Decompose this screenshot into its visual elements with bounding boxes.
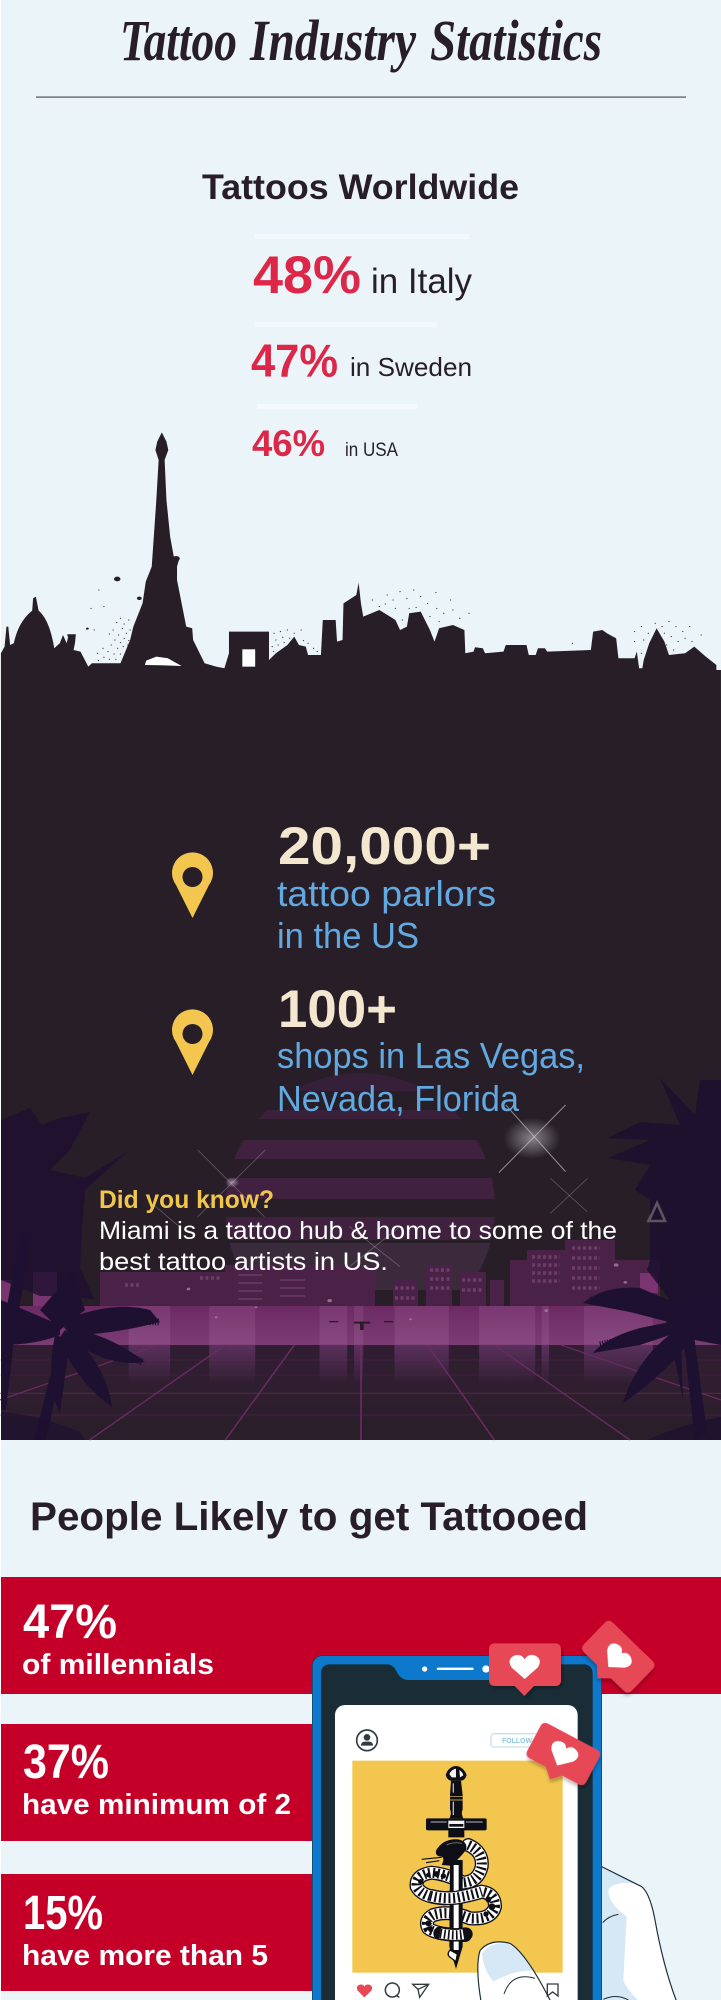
bar: 37% have minimum of 2: have minimum of 2: [22, 1789, 291, 1821]
icon: map pin 1: [172, 852, 213, 918]
Miami retro scene: [0, 1073, 721, 1440]
icon: hand palm: [602, 1867, 677, 2000]
sparkles: [152, 1105, 666, 1320]
follow button: FOLLOW: [502, 1738, 532, 1745]
stat: 100+ shops in Las Vegas, Nevada, Florida: [277, 980, 585, 1119]
title: [120, 8, 602, 73]
title: Industry: [249, 8, 416, 73]
like badge 1: [489, 1643, 561, 1696]
post card: [335, 1705, 578, 2000]
title: Statistics: [430, 8, 602, 73]
sun stripes: [220, 1073, 500, 1290]
dagger: [426, 1766, 487, 1969]
snake body behind blade: [417, 1845, 495, 1935]
callout: did you know: best tattoo artists in US.: [99, 1248, 388, 1276]
horizon band and floor: [1, 1306, 721, 1345]
stat: 47% in Sweden: [251, 322, 472, 386]
heading: Tattoos Worldwide: Tattoos Worldwide: [202, 168, 519, 207]
bar: 47% of millennials: 47%: [23, 1596, 117, 1649]
bar: 47% of millennials: of millennials: [22, 1649, 214, 1681]
callout: did you know: Did you know?: [99, 1186, 274, 1214]
icon: map pin 2: [172, 1009, 213, 1075]
grid lines: [0, 1345, 721, 1440]
like badge 2: [574, 1619, 657, 1701]
icon: send: [413, 1984, 429, 1997]
follow button: [491, 1734, 538, 1747]
stat: 47% in Sweden: in Sweden: [350, 352, 472, 382]
stat: 46% in USA: 46%: [252, 423, 325, 464]
phone body: [312, 1656, 602, 2000]
stat: 100+ shops in Las Vegas, Nevada, Florida: shops in Las Vegas,: [277, 1035, 585, 1076]
like badge 3: [520, 1721, 602, 1795]
icon: red heart: [357, 1985, 372, 1997]
stat: 20,000+ tattoo parlors in the US: tattoo parlors: [277, 873, 496, 914]
icon: finger: [478, 1942, 552, 2000]
callout: did you know: Miami is a tattoo hub & home to some of the: [99, 1217, 617, 1245]
snake head: [422, 1839, 466, 1866]
dark city panel background: [1, 700, 721, 1440]
stat: 48% in Italy: 48%: [253, 246, 361, 305]
title: Tattoo: [120, 8, 237, 73]
icon: bookmark: [547, 1984, 558, 1996]
bar: 37% have minimum of 2: [1, 1724, 313, 1841]
bar: 15% have more than 5: [1, 1874, 313, 1991]
stat: 48% in Italy: [253, 234, 472, 305]
road marker: [329, 1321, 393, 1330]
phone camera and speaker: [422, 1665, 490, 1673]
city buildings: [1, 1240, 660, 1317]
reflections: [129, 1306, 653, 1384]
bar: 47% of millennials: [1, 1577, 721, 1694]
stat: 100+ shops in Las Vegas, Nevada, Florida: 100+: [278, 980, 397, 1039]
phone with tattoo post: [312, 1619, 677, 2000]
dagger tip ornament: [448, 1950, 457, 1962]
stat: 46% in USA: in USA: [345, 440, 398, 461]
stat: 20,000+ tattoo parlors in the US: 20,000+: [278, 817, 491, 876]
snake skin spots: [418, 1871, 495, 1932]
tattoo image panel: [352, 1761, 563, 1973]
bar: 37% have minimum of 2: 37%: [23, 1736, 109, 1789]
stat: 47% in Sweden: 47%: [251, 334, 338, 386]
stat: 20,000+ tattoo parlors in the US: [277, 817, 496, 956]
stat: 46% in USA: [252, 404, 417, 464]
icon: avatar: [357, 1730, 377, 1751]
stat: 100+ shops in Las Vegas, Nevada, Florida: Nevada, Florida: [277, 1078, 520, 1119]
left palm trees: [1, 1108, 160, 1440]
stat: 48% in Italy: in Italy: [371, 262, 472, 301]
heading: People Likely to get Tattooed: People Likely to get Tattooed: [30, 1495, 588, 1539]
bar: 15% have more than 5: have more than 5: [22, 1940, 268, 1972]
skyline silhouette with Eiffel Tower: [1, 432, 721, 720]
icon: comment: [385, 1983, 399, 1997]
icon: triangle ornament: [649, 1203, 665, 1221]
stat: 20,000+ tattoo parlors in the US: in the US: [277, 915, 419, 956]
icon: dagger and snake tattoo: [417, 1766, 495, 1969]
callout: did you know: [99, 1186, 617, 1276]
phone screen: [321, 1664, 593, 2000]
right palm trees: [583, 1078, 721, 1440]
bar: 15% have more than 5: 15%: [23, 1887, 103, 1940]
snake segments over blade: [430, 1892, 482, 1935]
